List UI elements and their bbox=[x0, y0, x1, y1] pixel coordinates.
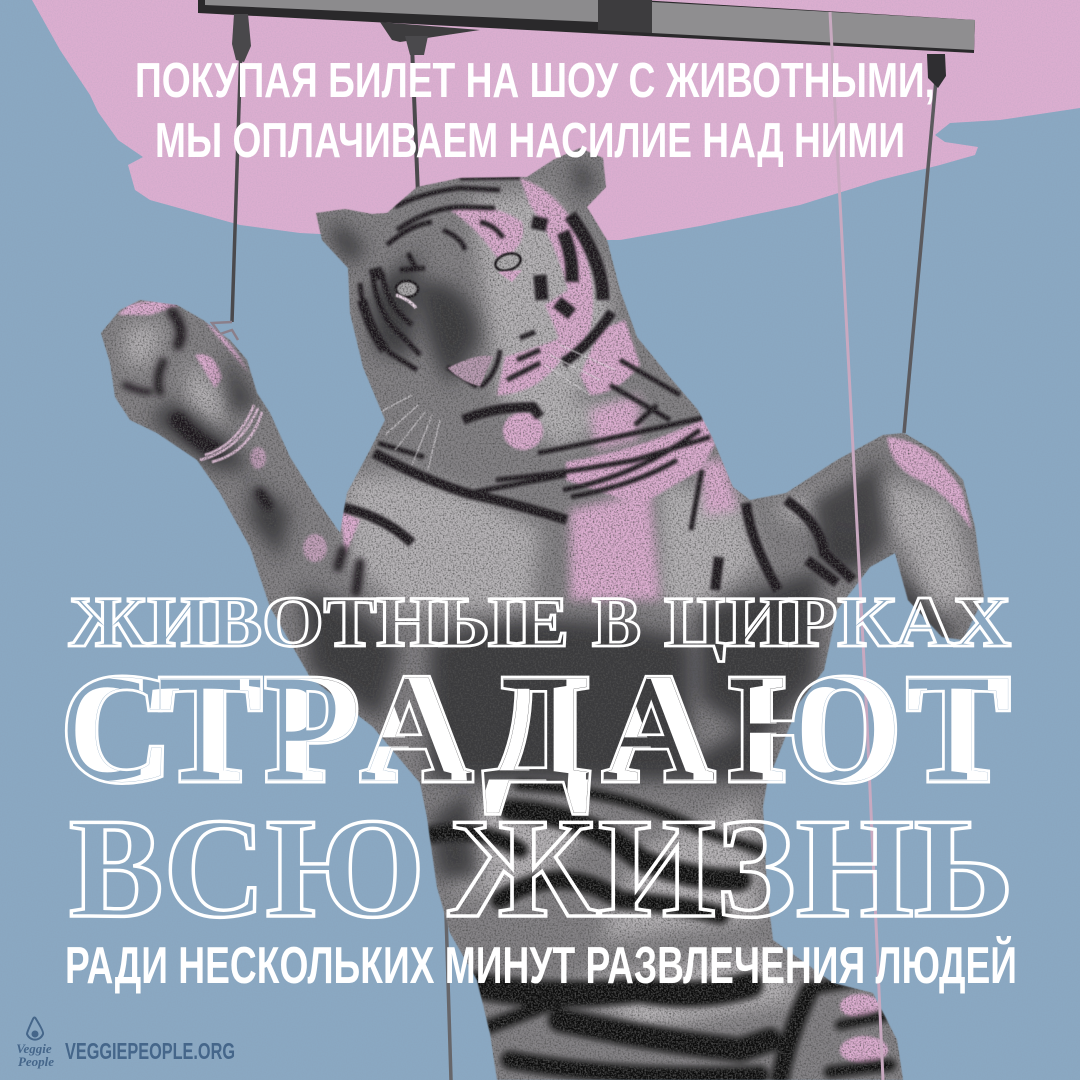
website: VEGGIEPEOPLE.ORG bbox=[65, 1038, 235, 1064]
logo: avocado: People bbox=[18, 1054, 54, 1069]
head and neck stripes bbox=[340, 177, 853, 590]
title line: animals in circuses: ЖИВОТНЫЕ bbox=[69, 582, 569, 662]
lower body wide stripes bbox=[430, 785, 890, 1078]
front string bbox=[830, 12, 883, 1080]
tiger bbox=[90, 140, 1000, 1080]
title line: all their life: ВСЮ bbox=[69, 789, 425, 947]
title line: animals in circuses: ЦИРКАХ bbox=[664, 582, 1011, 662]
tiger chest pink wash bbox=[570, 395, 738, 600]
logo: avocado bbox=[16, 1018, 54, 1069]
paw wrapped rope bbox=[200, 405, 262, 462]
tiger dark shading bbox=[150, 160, 960, 880]
back strings bbox=[212, 45, 936, 1080]
wooden control bar bbox=[198, 0, 975, 88]
top caption bbox=[135, 54, 935, 168]
whiskers bbox=[375, 345, 615, 470]
title line: all their life: ЖИЗНЬ bbox=[448, 789, 1014, 947]
logo: avocado: Veggie bbox=[16, 1041, 52, 1056]
paw gaps bbox=[125, 312, 360, 592]
title line: animals in circuses: В bbox=[592, 582, 641, 662]
title line: suffer bbox=[64, 674, 1011, 816]
pink brush stroke bbox=[32, 0, 1080, 240]
tiger light fur bbox=[125, 190, 975, 1030]
tiger pink highlights bbox=[118, 178, 972, 1064]
tiger eyes and nose bbox=[396, 250, 523, 386]
title line: animals in circuses bbox=[69, 582, 1011, 662]
tiger base bbox=[90, 140, 1000, 1080]
title line: all their life bbox=[69, 789, 1014, 947]
